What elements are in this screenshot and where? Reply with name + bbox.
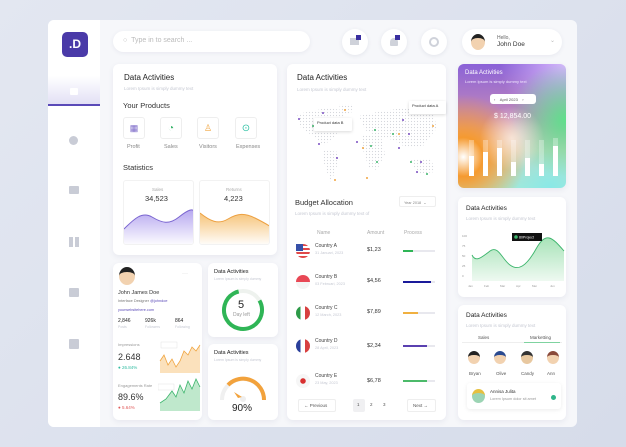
panel: gauge 90%: Lorem Ipsum is simply dummy xyxy=(214,358,261,362)
panel: line chart: 80Project xyxy=(519,236,534,240)
panel: line chart: Mar xyxy=(500,284,505,288)
panel: map & budget allocation: 2 xyxy=(370,402,373,407)
table rows: 12 March, 2023 xyxy=(315,313,341,317)
chart: returns xyxy=(199,180,270,245)
panel: products & statistics: Lorem Ipsum is simply dummy text xyxy=(124,86,193,91)
panel: line chart: Apr xyxy=(516,284,521,288)
product icons xyxy=(123,117,260,150)
panel: profile: Impressions xyxy=(118,342,140,347)
user pill xyxy=(462,29,562,55)
dropdown xyxy=(399,196,436,207)
panel: line chart: 75 xyxy=(462,244,466,248)
panel: gradient bar chart: Lorem Ipsum is simply dummy text xyxy=(465,79,527,84)
logo xyxy=(62,32,88,57)
message: Annisa Julita xyxy=(490,389,516,394)
panel: line chart: Mei xyxy=(532,284,537,288)
user pill: Hello, xyxy=(497,35,510,41)
product icons: Profit xyxy=(127,144,140,150)
panel: map & budget allocation: Process xyxy=(404,230,422,236)
panel: profile: 2.648 xyxy=(118,352,141,362)
panel: line chart: Data Activities xyxy=(466,205,507,212)
bars xyxy=(469,138,558,176)
panel: donut days left: Day left xyxy=(233,312,250,318)
table rows: $1,23 xyxy=(367,247,381,253)
panel: map & budget allocation: Next → xyxy=(413,403,428,408)
table rows: Country E xyxy=(315,373,337,379)
panel: map & budget allocation: Amount xyxy=(367,230,384,236)
panel: donut days left: 5 xyxy=(238,299,244,311)
panel: line chart: 25 xyxy=(462,264,466,268)
panel: map & budget allocation: 1 xyxy=(357,402,360,407)
table rows: 03 Februari, 2023 xyxy=(315,282,345,286)
panel: team: Marketting xyxy=(530,335,551,340)
panel: gradient bar chart: Data Activities xyxy=(465,70,503,76)
panel: line chart: Feb xyxy=(484,284,490,288)
product icons: ♙ xyxy=(204,123,212,133)
panel: donut days left: Lorem Ipsum is simply dummy xyxy=(214,277,261,281)
world dot map xyxy=(297,106,436,182)
panel: team: Candy xyxy=(521,371,534,376)
panel: line chart: 100 xyxy=(462,234,467,238)
table rows: 28 April, 2023 xyxy=(315,346,338,350)
panel: products & statistics: Statistics xyxy=(123,163,153,172)
panel: map & budget allocation: Data Activities xyxy=(297,73,347,82)
product icons: ▦ xyxy=(130,123,138,133)
message: Lorem Ipsum dolor sit amet xyxy=(490,397,536,401)
nav icons xyxy=(69,136,78,145)
search bar xyxy=(113,31,310,52)
panel: gauge 90%: Data Activities xyxy=(214,350,249,356)
panel: team: Lorem Ipsum is simply dummy text xyxy=(466,323,535,328)
panel: products & statistics: Data Activities xyxy=(124,73,174,82)
heading: budget allocation: Budget Allocation xyxy=(295,198,353,207)
pagination: ← Previous xyxy=(304,403,327,408)
logo: .D xyxy=(69,37,81,51)
panel: map & budget allocation: 3 xyxy=(383,402,386,407)
table rows: $6,78 xyxy=(367,378,381,384)
month selector xyxy=(490,94,536,104)
panel: gradient bar chart: $ 12,854.00 xyxy=(494,113,531,120)
panel: line chart: Lorem Ipsum is simply dummy text xyxy=(466,216,535,221)
sidebar xyxy=(48,20,100,427)
panel: profile: John James Doe xyxy=(118,290,159,296)
chart: sales: Sales xyxy=(152,187,163,192)
callout: product data A xyxy=(409,101,446,114)
panel: gauge 90% xyxy=(208,344,278,420)
panel: profile: 89.6% xyxy=(118,392,144,402)
panel: profile: yourwebsitehere.com xyxy=(118,308,154,312)
product icons: Sales xyxy=(164,144,178,150)
table rows: Country C xyxy=(315,305,338,311)
pagination xyxy=(298,399,336,412)
callout: product data B xyxy=(314,118,352,131)
avatar xyxy=(119,267,135,285)
main frame xyxy=(48,20,577,427)
panel: profile: 2,846 xyxy=(118,318,131,324)
panel: profile: ··· xyxy=(182,271,188,277)
panel: profile: Posts xyxy=(118,325,127,329)
chart: sales xyxy=(123,180,194,245)
table rows: Country A xyxy=(315,243,337,249)
callout: product data B: Product data B xyxy=(317,120,343,125)
table rows: $2,34 xyxy=(367,343,381,349)
active nav item xyxy=(48,76,100,106)
message xyxy=(467,383,561,409)
panel: donut days left xyxy=(208,263,278,337)
panel: line chart: Jan xyxy=(468,284,473,288)
panel: products & statistics xyxy=(113,64,277,255)
panel: line chart: 50 xyxy=(462,254,466,258)
product icons: ◔ xyxy=(168,123,174,134)
panel: line chart: 0 xyxy=(462,274,464,278)
table rows: Country B xyxy=(315,274,337,280)
panel: profile: 864 xyxy=(175,318,183,324)
chart: returns: Returns xyxy=(226,187,242,192)
table rows: 23 May, 2023 xyxy=(315,381,338,385)
table rows: $4,56 xyxy=(367,278,381,284)
panel: profile: 926k xyxy=(145,318,156,324)
panel: team: Ann xyxy=(547,371,555,376)
chart: returns: 4,223 xyxy=(224,194,243,203)
panel: profile: Followers xyxy=(145,325,160,329)
panel: donut days left: Data Activities xyxy=(214,269,249,275)
panel: profile: Interface Designer @johndoe xyxy=(118,299,167,303)
user pill: John Doe xyxy=(497,41,525,48)
callout: product data A: Product data A xyxy=(412,103,438,108)
user pill: ⌄ xyxy=(550,38,555,44)
top icons xyxy=(342,29,368,55)
search bar: ○ Type in to search ... xyxy=(123,37,192,44)
panel: team: Sales xyxy=(478,335,489,340)
panel: team: Olive xyxy=(496,371,506,376)
table rows: $7,89 xyxy=(367,309,381,315)
panel: team: Bryan xyxy=(469,371,481,376)
panel: map & budget allocation: Name xyxy=(317,230,330,236)
panel: profile xyxy=(113,263,202,420)
month selector: ‹ April 2023 › xyxy=(494,96,524,102)
dropdown: Year 2018 ⌄ xyxy=(404,201,426,205)
panel: profile: Following xyxy=(175,325,190,329)
panel: profile: ● 26.84% xyxy=(118,365,137,370)
table rows: 31 Januari, 2023 xyxy=(315,251,343,255)
panel: profile: Engagements Rate xyxy=(118,383,152,388)
table rows xyxy=(296,243,435,388)
panel: team: Data Activities xyxy=(466,312,507,319)
chart: sales: 34,523 xyxy=(145,194,168,203)
panel: map & budget allocation: Lorem Ipsum is simply dummy text of xyxy=(295,211,369,216)
panel: gauge 90%: 90% xyxy=(232,403,252,414)
panel: line chart xyxy=(458,197,566,297)
product icons: Visitors xyxy=(199,144,217,150)
sparkline charts xyxy=(158,342,200,411)
panel: profile: ● 5.64% xyxy=(118,405,135,410)
panel: map & budget allocation xyxy=(287,64,446,420)
product icons: Expenses xyxy=(236,144,260,150)
panel: line chart: Jun xyxy=(550,284,555,288)
panel: team xyxy=(458,305,566,420)
avatars xyxy=(468,351,480,364)
panel: gradient bar chart xyxy=(458,64,566,188)
panel: products & statistics: Your Products xyxy=(123,101,170,110)
table rows: Country D xyxy=(315,338,338,344)
product icons: ⊙ xyxy=(242,123,250,134)
panel: map & budget allocation: Lorem Ipsum is simply dummy text xyxy=(297,87,366,92)
